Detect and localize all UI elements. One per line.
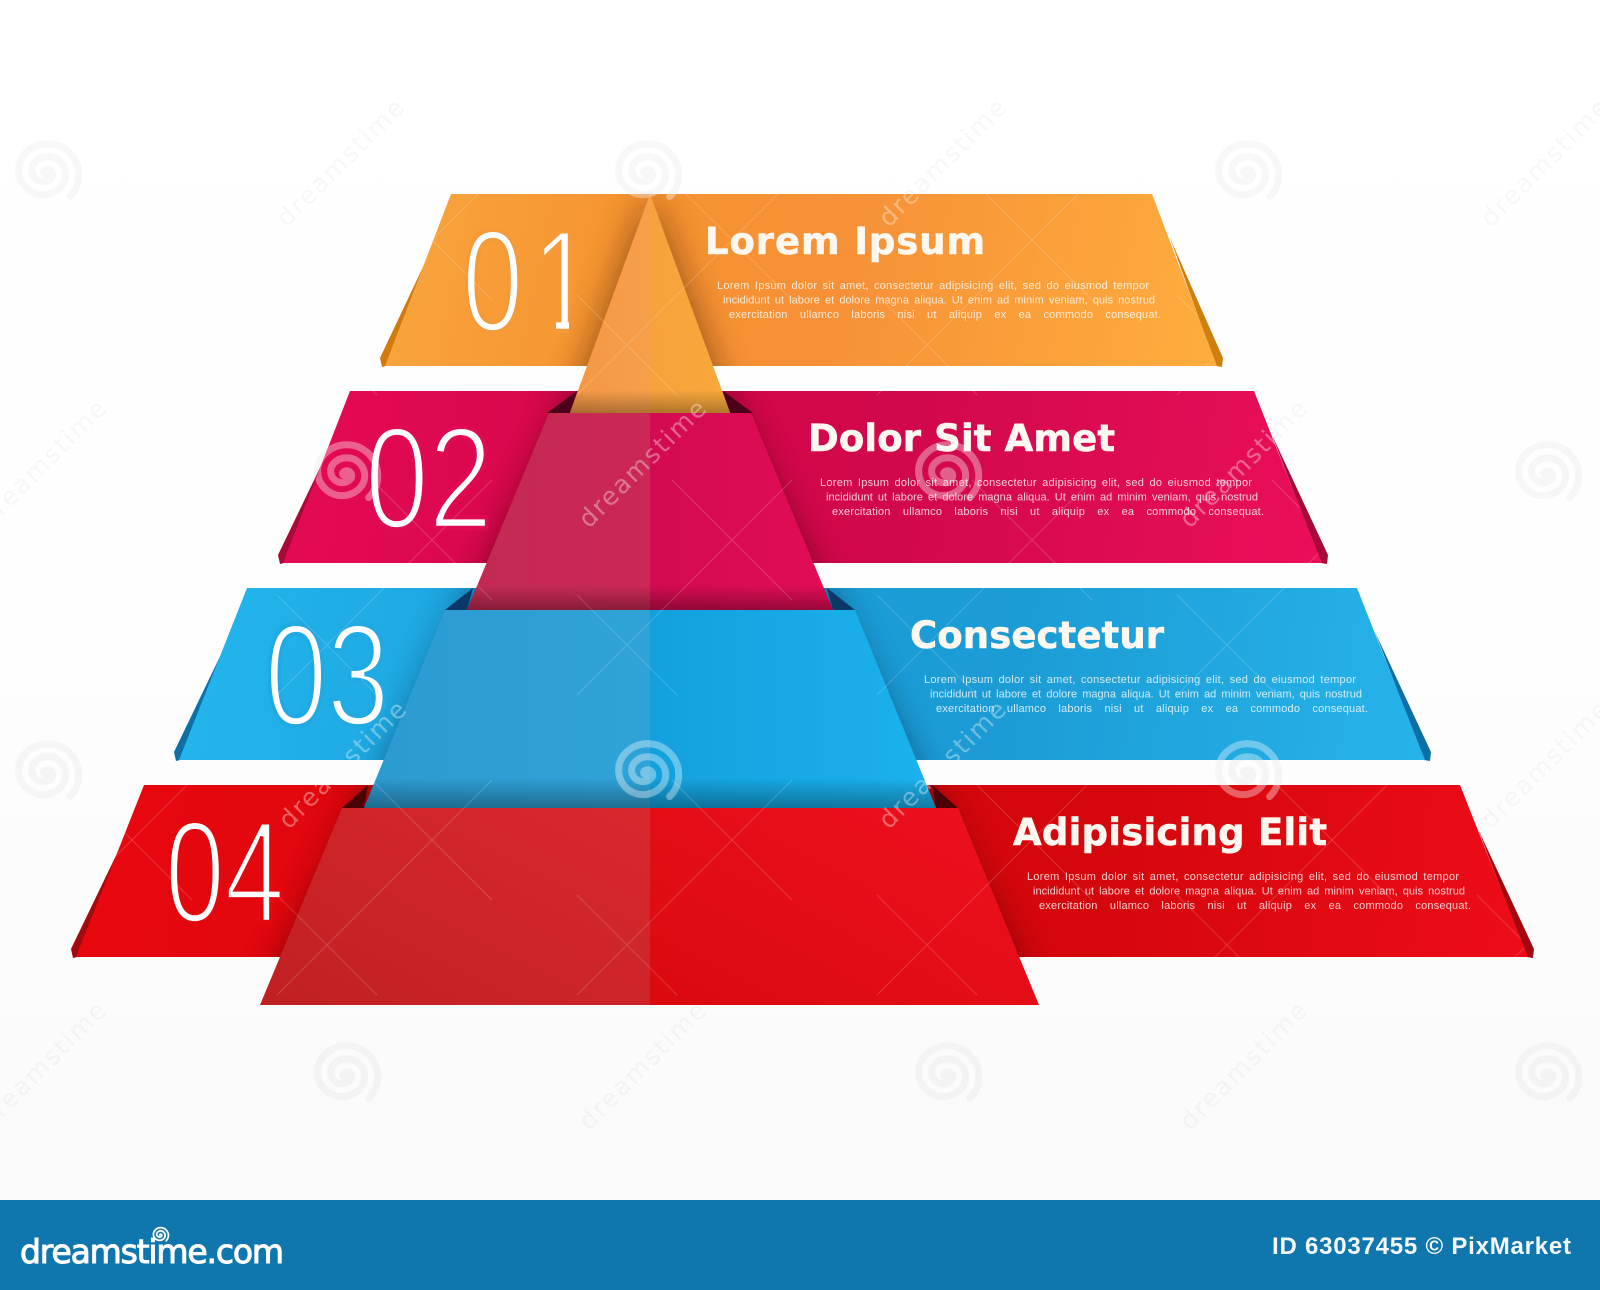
number 01: 1: [532, 200, 593, 363]
body text: Lorem Ipsum dolor sit amet, consectetur adipisicing elit, sed do eiusmod tempor: [717, 280, 1149, 292]
number 03: 03: [265, 595, 389, 756]
body text: exercitation ullamco laboris nisi ut aliquip ex ea commodo consequat.: [1039, 900, 1471, 912]
body text: incididunt ut labore et dolore magna aliqua. Ut enim ad minim veniam, quis nostrud: [826, 492, 1258, 504]
shadow wedges beside the blue section: [342, 785, 958, 808]
panel: band 03 blue: [174, 580, 1431, 808]
watermark overlay spirals and text: dreamstime: [873, 694, 1013, 834]
heading: Adipisicing Elit: [1013, 811, 1327, 854]
number 01: [468, 232, 569, 330]
text block: Consectetur: [910, 614, 1368, 715]
text block: Dolor Sit Amet: [808, 417, 1264, 518]
watermark overlay spirals and text: [282, 194, 1281, 827]
body text: [820, 477, 1264, 518]
watermark on background: dreamstime: [271, 92, 411, 232]
watermark overlay spirals and text: dreamstime: [873, 92, 1013, 232]
text block: Lorem Ipsum: [705, 220, 1161, 321]
number 04: 04: [165, 792, 284, 954]
heading: Lorem Ipsum: [705, 220, 985, 263]
footer credit: ID 63037455 © PixMarket: [1272, 1233, 1571, 1260]
body text: incididunt ut labore et dolore magna aliqua. Ut enim ad minim veniam, quis nostrud: [930, 688, 1362, 700]
watermark overlay spirals and text: dreamstime: [1174, 393, 1314, 533]
watermark overlay spirals and text: dreamstime: [573, 393, 713, 533]
number 01: 0: [462, 200, 523, 363]
panel: band 02 crimson: [278, 391, 1328, 564]
body text: Lorem Ipsum dolor sit amet, consectetur adipisicing elit, sed do eiusmod tempor: [820, 477, 1252, 489]
watermark on background: dreamstime: [873, 92, 1013, 232]
panel: band 04 red: [71, 778, 1534, 1005]
body text: [924, 674, 1368, 715]
body text: Lorem Ipsum dolor sit amet, consectetur adipisicing elit, sed do eiusmod tempor: [1027, 871, 1459, 883]
body text: incididunt ut labore et dolore magna aliqua. Ut enim ad minim veniam, quis nostrud: [723, 294, 1155, 306]
watermark overlay lines: [116, 194, 1524, 996]
body text: [717, 280, 1161, 321]
pyramid section 2 crimson: [467, 413, 833, 610]
text block: Adipisicing Elit: [1013, 811, 1471, 912]
pyramid section 3 blue: [364, 610, 936, 808]
shadow wedges beside the orange tip: [547, 391, 753, 413]
panel: band 01 orange: [380, 194, 1223, 367]
watermark on background: dreamstime: [573, 995, 713, 1135]
body text: exercitation ullamco laboris nisi ut aliquip ex ea commodo consequat.: [936, 703, 1368, 715]
heading: Dolor Sit Amet: [808, 417, 1115, 460]
watermark on background: dreamstime: [1174, 995, 1314, 1135]
pyramid section 1 orange: [569, 194, 731, 415]
watermark on background: dreamstime: [1174, 393, 1314, 533]
body text: Lorem Ipsum dolor sit amet, consectetur adipisicing elit, sed do eiusmod tempor: [924, 674, 1356, 686]
body text: exercitation ullamco laboris nisi ut aliquip ex ea commodo consequat.: [729, 309, 1161, 321]
footer logo spiral icon: [151, 1224, 172, 1245]
footer bar: [0, 1200, 1600, 1290]
number 02: 02: [365, 397, 492, 559]
shadow wedges beside the crimson section: [445, 588, 855, 610]
watermark overlay spirals and text: dreamstime: [273, 694, 413, 834]
footer logo text: dreamstime.com: [20, 1232, 284, 1271]
body text: [1027, 871, 1471, 912]
body text: exercitation ullamco laboris nisi ut aliquip ex ea commodo consequat.: [832, 506, 1264, 518]
body text: incididunt ut labore et dolore magna aliqua. Ut enim ad minim veniam, quis nostrud: [1033, 886, 1465, 898]
heading: Consectetur: [910, 614, 1165, 657]
pyramid section 4 red: [260, 808, 1039, 1005]
